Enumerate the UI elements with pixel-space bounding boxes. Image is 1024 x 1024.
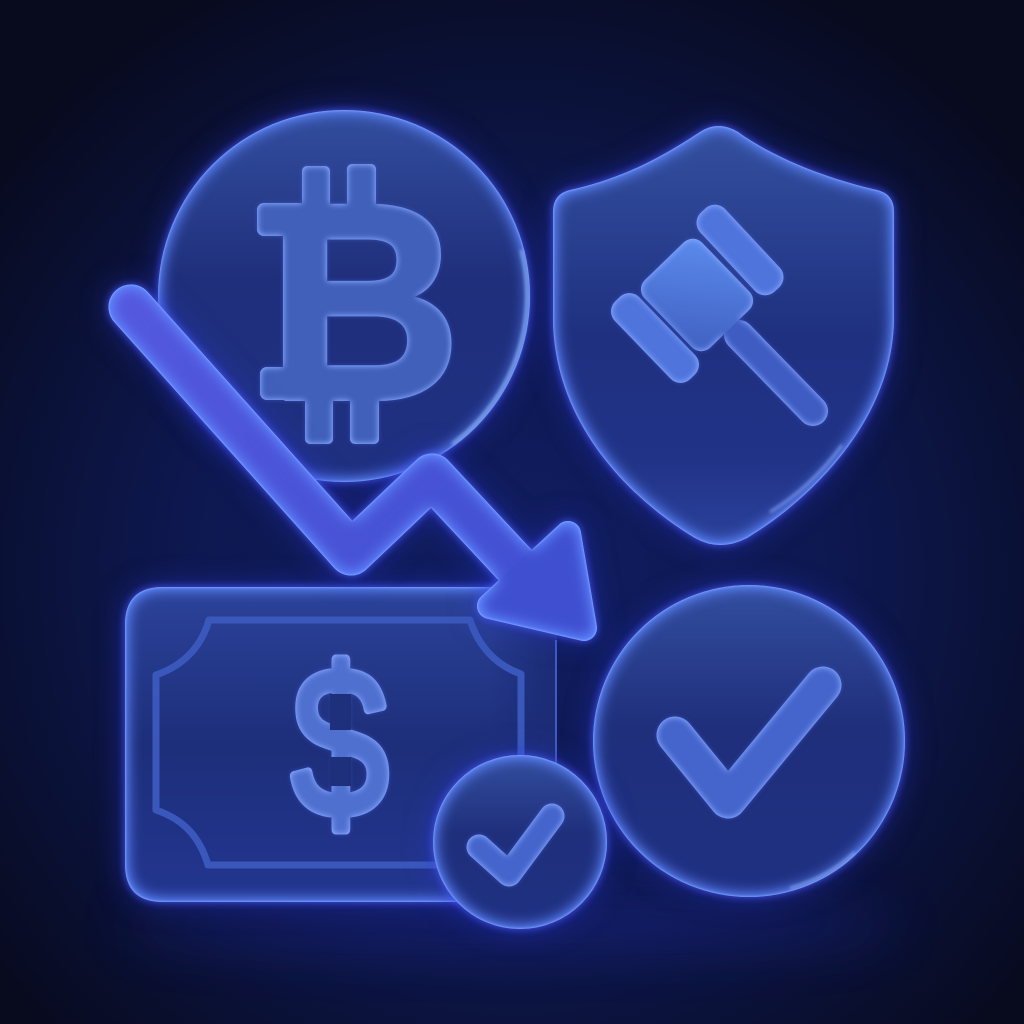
icon: large check badge [593, 585, 905, 897]
coin disc [158, 110, 530, 482]
note right edge [555, 640, 557, 770]
icon: bitcoin coin [158, 110, 530, 482]
floor glow [120, 899, 900, 951]
icon: shield with gavel [553, 126, 894, 545]
icon: falling arrow [131, 307, 584, 628]
note base [125, 587, 557, 902]
shield [553, 126, 894, 545]
dollar sign: $ [292, 625, 388, 860]
icon: small check badge [433, 755, 607, 929]
icon: banknote [125, 587, 557, 902]
badge disc [593, 585, 905, 897]
gavel head [636, 233, 758, 357]
check mark [675, 685, 823, 800]
gavel [605, 199, 813, 411]
gavel band bottom [605, 287, 705, 389]
gavel band top [691, 199, 789, 301]
note body [125, 587, 557, 902]
badge disc [433, 755, 607, 929]
note inner frame [156, 620, 521, 865]
gavel handle [739, 335, 813, 411]
arrow shaft [131, 307, 516, 566]
check mark [479, 816, 552, 874]
arrow head [490, 534, 584, 628]
bitcoin symbol: B [268, 146, 461, 457]
